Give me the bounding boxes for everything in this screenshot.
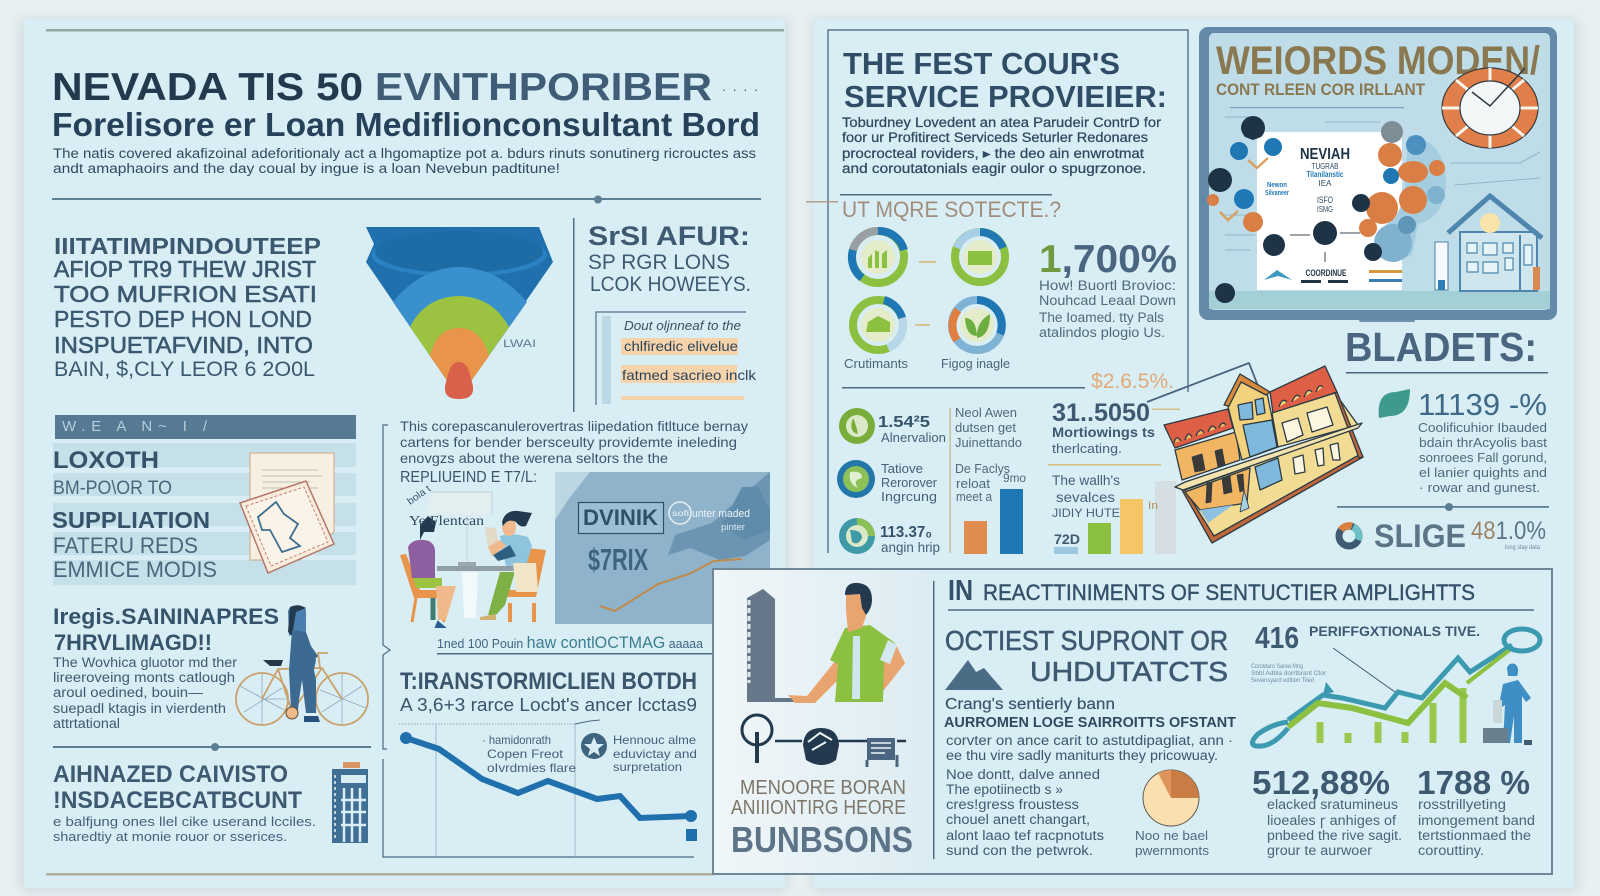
heading: THE FEST COUR'S bbox=[843, 46, 1120, 81]
blades body text: Coolificuhior Ibauded bbox=[1418, 421, 1547, 435]
text block: side heading: SrSI AFUR: bbox=[588, 221, 750, 251]
text block: side heading: LCOK HOWEEYS. bbox=[590, 273, 751, 296]
chart label bbox=[1255, 620, 1480, 655]
text block: middle paragraph: This corepascanulerovertras liipedation fitltuce bernay bbox=[400, 418, 748, 434]
small bar chart 2 bbox=[1052, 473, 1176, 554]
icon: person with suitcase bbox=[1483, 664, 1532, 745]
chart note left bbox=[482, 733, 576, 775]
pie caption: pwernmonts bbox=[1135, 843, 1210, 858]
illustration: map card: sofi bbox=[672, 509, 689, 518]
document text: COORDINUE bbox=[1306, 268, 1346, 278]
text block: bicycle heading: 7HRVLIMAGD!! bbox=[54, 630, 212, 655]
section band heading bbox=[55, 415, 356, 439]
stat: 1,700%: atalindos plogio Us. bbox=[1039, 325, 1165, 340]
text block: left column: alont laao tef racpnotuts bbox=[946, 828, 1104, 843]
text block: support body: AURROMEN LOGE SAIRROITTS OFSTANT bbox=[944, 715, 1236, 731]
text block: bicycle heading: aroul oedined, bouin— bbox=[53, 685, 204, 700]
document text: Tilanilanstic bbox=[1306, 170, 1344, 179]
stat: 1,700% bbox=[1039, 238, 1177, 340]
illustration: consultation at table: Ye Flentcan bbox=[409, 514, 484, 529]
chart label: PERIFFGXTIONALS TIVE. bbox=[1309, 623, 1480, 639]
funnel label: LWAI bbox=[503, 338, 536, 350]
stat: 1788 %: 1788 % bbox=[1417, 764, 1530, 801]
stat text: How! Buortl Brovioc: bbox=[1039, 278, 1176, 293]
text block: left column: Noe dontt, dalve anned bbox=[946, 767, 1100, 782]
text block: left column bbox=[946, 767, 1104, 858]
bicycle body text: The Wovhica gluotor md ther bbox=[53, 655, 238, 670]
stat: 31.5050: Mortiowings ts bbox=[1052, 424, 1155, 440]
stat: slige: SLIGE bbox=[1374, 518, 1466, 554]
donut 4 bbox=[952, 300, 1002, 350]
text block: support heading: UHDUTATCTS bbox=[1030, 656, 1228, 687]
metric row 3: angin hrip bbox=[881, 540, 940, 555]
small bar chart 2: In bbox=[1148, 500, 1158, 512]
text block: analyzed account: AIHNAZED CAIVISTO bbox=[53, 761, 288, 788]
metric row 2: Ingrcung bbox=[881, 489, 937, 504]
illustration: map card: pinter bbox=[721, 522, 745, 532]
text block: stacked headline bbox=[54, 233, 321, 381]
stat: blades figure: sonroees Fall gorund, bbox=[1419, 451, 1547, 465]
striped list: BM-PO\OR TO bbox=[53, 478, 172, 499]
text block: transformation heading: A 3,6+3 rarce Locbt's ancer lcctas9 bbox=[400, 695, 697, 715]
text block: left column: The epotiinectb s » bbox=[946, 782, 1063, 797]
chart tiny note: Coroldaro Sarea Mng bbox=[1251, 664, 1303, 670]
small bar chart 2: JIDIY HUTE bbox=[1052, 506, 1120, 520]
title: NEVADA TIS 50 EVNTHPORIBER bbox=[52, 66, 712, 109]
stat: blades figure bbox=[1418, 387, 1548, 495]
funnel chart bbox=[366, 227, 553, 399]
text block: stacked headline: INSPUETAFVIND, INTO bbox=[54, 332, 313, 358]
small bar chart 1: De Faclys bbox=[955, 461, 1010, 476]
text block: analyzed account: sharedtiy at monie rouor or sserices. bbox=[53, 829, 287, 844]
text block: left column: chouel anett changart, bbox=[946, 812, 1090, 827]
donut 1 bbox=[852, 231, 904, 283]
stat: slige bbox=[1339, 517, 1546, 554]
document text: ISFO bbox=[1317, 195, 1333, 205]
text block: side heading: SP RGR LONS bbox=[588, 251, 730, 274]
text block: support body: corvter on ance carit to astutdipagliat, ann · bbox=[946, 733, 1233, 748]
text block: support body bbox=[944, 696, 1236, 763]
chart note right: surpretation bbox=[613, 760, 682, 774]
pie caption bbox=[1135, 828, 1210, 858]
stat: 1788 % bbox=[1417, 764, 1535, 858]
striped list: SUPPLIATION bbox=[52, 507, 210, 533]
node cluster: dark bbox=[1208, 116, 1382, 303]
text block: transformation heading: T:IRANSTORMICLIEN BOTDH bbox=[400, 668, 697, 695]
intro paragraph: procrocteal roviders, ▸ the deo ain enwrotmat bbox=[842, 146, 1144, 161]
metric note 1: Juinettando bbox=[955, 435, 1022, 450]
node cluster: orange bbox=[1207, 143, 1445, 237]
striped list: LOXOTH bbox=[53, 447, 159, 474]
callout: highlighted notes: Dout oljnneaf to the bbox=[624, 318, 741, 333]
heading: blades: BLADETS: bbox=[1345, 324, 1537, 370]
small bar chart 1: meet a bbox=[956, 489, 993, 504]
metric row 1 bbox=[839, 408, 946, 445]
heading bbox=[843, 46, 1167, 114]
chart tiny note: Sbbl Adbla dorrtbrant Ctor bbox=[1251, 671, 1326, 677]
panel: service provider frame bbox=[828, 30, 1188, 553]
node cluster: pale blue blob bbox=[1374, 135, 1446, 262]
document text: NEVIAH bbox=[1300, 146, 1350, 163]
illustration: tilted building bbox=[1147, 363, 1363, 543]
text block: stacked headline: TOO MUFRION ESATI bbox=[54, 281, 317, 307]
chart badge icon bbox=[581, 733, 607, 759]
illustration: map card: unter maded bbox=[692, 508, 750, 520]
chart note left: Copen Freot bbox=[487, 747, 564, 761]
intro paragraph: Toburdney Lovedent an atea Parudeir ContrD for bbox=[842, 115, 1162, 130]
text block: mentor labels: MENOORE BORAN bbox=[740, 777, 906, 799]
donut icons bbox=[852, 231, 1005, 350]
stat: 31.5050: therlcating. bbox=[1052, 441, 1122, 456]
icon: mountain bbox=[945, 660, 1003, 690]
pie caption: Noo ne bael bbox=[1135, 828, 1208, 843]
metric row 2: Rerorover bbox=[881, 475, 938, 490]
illustration: consultation at table bbox=[400, 483, 546, 627]
stat: 31.5050 bbox=[1048, 399, 1161, 466]
panel: right sheet bbox=[813, 19, 1574, 888]
text block: mentor labels: ANIIIONTIRG HEORE bbox=[731, 797, 906, 819]
text block: analyzed account: e balfjung ones llel cike userand lcciles. bbox=[53, 814, 316, 829]
text block: middle paragraph: cartens for bender bersceulty providemte ineleding bbox=[400, 434, 737, 450]
laptop heading bbox=[1216, 39, 1540, 99]
stat: slige: 481.0% bbox=[1471, 517, 1546, 545]
text block: middle paragraph: enovgzs about the werena seltors the the bbox=[400, 450, 668, 466]
small bar chart 1: 9mo bbox=[1003, 471, 1026, 485]
pie chart bbox=[1143, 770, 1199, 826]
central document bbox=[1257, 132, 1402, 290]
metric note 1: dutsen get bbox=[955, 420, 1016, 435]
image caption: 1ned 100 Pouin haw contlOCTMAG aaaaa bbox=[437, 633, 704, 652]
stat: blades figure: bdain thrAcyolis bast bbox=[1419, 436, 1548, 450]
donut captions bbox=[844, 357, 1010, 371]
value: $2.6.5%: $2.6.5%. bbox=[1091, 370, 1174, 393]
metric row 3 bbox=[839, 518, 940, 555]
small bar chart 2: The wallh's bbox=[1052, 473, 1120, 488]
clock icon bbox=[1442, 68, 1538, 148]
stat: 512,88%: 512,88% bbox=[1252, 764, 1390, 801]
text block: middle paragraph bbox=[400, 418, 748, 486]
stat text left: elacked sratumineus bbox=[1267, 797, 1398, 812]
stat: 1,700%: The Ioamed. tty Pals bbox=[1039, 310, 1164, 325]
stat: slige: long stay data bbox=[1505, 545, 1541, 551]
text block: support heading bbox=[945, 625, 1228, 687]
text block: left column: sund con the petwrok. bbox=[946, 843, 1093, 858]
stat: 1788 %: corouttiny. bbox=[1418, 843, 1484, 858]
intro paragraph bbox=[842, 115, 1162, 176]
metric row 2 text: Tatiove bbox=[881, 461, 923, 476]
icon: house bbox=[1448, 196, 1542, 291]
document text: TUGRAB bbox=[1312, 162, 1338, 171]
heading: SERVICE PROVIEIER: bbox=[844, 79, 1167, 114]
stat: 1,700%: Nouhcad Leaal Down bbox=[1039, 293, 1176, 308]
text block: stacked headline: AFIOP TR9 THEW JRIST bbox=[54, 256, 316, 282]
chart label: 416 bbox=[1255, 620, 1299, 655]
text block: bicycle heading: attrtational bbox=[53, 716, 120, 731]
small bar chart 1 bbox=[955, 461, 1026, 554]
document marks bbox=[1220, 158, 1402, 283]
stat: blades figure: 11139 -% bbox=[1418, 387, 1547, 422]
title: .... bbox=[722, 78, 758, 94]
subheading: more selected: UT MQRE SOTECTE.? bbox=[842, 197, 1061, 222]
text block: analyzed account bbox=[53, 761, 316, 844]
striped list: EMMICE MODIS bbox=[53, 557, 217, 582]
icon: folded map bbox=[240, 453, 334, 573]
stat text right: rosstrillyeting bbox=[1418, 797, 1506, 812]
panel: reactive highlights bbox=[713, 569, 1552, 874]
illustration: map card bbox=[555, 472, 770, 624]
striped list bbox=[52, 443, 356, 585]
stat: 512,88% bbox=[1252, 764, 1402, 858]
text block: support body: Crang's sentierly bann bbox=[945, 696, 1115, 713]
stat: 1788 %: tertstionmaed the bbox=[1418, 828, 1531, 843]
document text: IEA bbox=[1318, 179, 1332, 188]
text block: side heading bbox=[588, 221, 751, 296]
text block: bicycle heading: lireeroveing monts catlough bbox=[53, 670, 235, 685]
callout: highlighted notes: fatmed sacrieo inclk bbox=[622, 367, 757, 383]
text block: bicycle heading: Iregis.SAININAPRES bbox=[53, 604, 279, 629]
laptop heading: WEIORDS MODEN/ bbox=[1216, 39, 1540, 83]
icon: leaf bbox=[1379, 389, 1410, 418]
stat: 1788 %: imongement band bbox=[1418, 813, 1535, 828]
text block: bicycle heading bbox=[53, 604, 279, 731]
illustration: map card: DVINIK bbox=[583, 505, 658, 530]
bracket lines bbox=[383, 425, 694, 857]
striped list: FATERU REDS bbox=[53, 533, 198, 558]
text block: support body: ee thu vire sadly maniturts they pricowuay. bbox=[946, 748, 1218, 763]
small bar chart 2: 72D bbox=[1054, 531, 1080, 547]
title bbox=[52, 66, 760, 143]
document text: Silvaneer bbox=[1265, 190, 1289, 197]
intro paragraph: and coroutatonials eagir oulor o spugrzonoe. bbox=[842, 161, 1146, 176]
illustration: consultation at table: bola t bbox=[405, 483, 433, 507]
illustration: person at terminal bbox=[747, 583, 905, 703]
chart note right: eduvictay and bbox=[613, 747, 697, 761]
callout: highlighted notes: chlfiredic elivelue bbox=[624, 338, 738, 354]
panel: left sheet bbox=[24, 19, 785, 888]
illustration: map card: $7RIX bbox=[588, 542, 648, 577]
icon: person with bicycle bbox=[236, 605, 368, 725]
small bar chart 1: reloat bbox=[956, 476, 990, 491]
stat: 512,88%: lioeales ꞅ anhiges of bbox=[1267, 813, 1396, 829]
icon: tall building bbox=[332, 762, 368, 843]
document text bbox=[1265, 146, 1350, 278]
text block: stacked headline: BAIN, $,CLY LEOR 6 2O0L bbox=[54, 358, 315, 381]
text block: support heading: OCTIEST SUPRONT OR bbox=[945, 625, 1228, 656]
chart note left: · hamidonrath bbox=[482, 733, 551, 747]
metric note 1 bbox=[955, 405, 1022, 450]
metric row 2 bbox=[837, 460, 938, 504]
document text: Newon bbox=[1267, 182, 1287, 189]
intro paragraph: foor ur Profitirect Serviceds Seturler Redonares bbox=[842, 130, 1148, 145]
metric row 3: 113.37₀ bbox=[880, 524, 932, 541]
text block: bicycle heading: suepadl ktagis in vierdenth bbox=[53, 701, 226, 716]
chart note right bbox=[613, 733, 697, 774]
stat: 512,88%: pnbeed the rive sagit. bbox=[1267, 828, 1402, 843]
line chart: decline bbox=[399, 720, 697, 857]
donut 3 bbox=[853, 300, 903, 350]
donut captions: Figog inagle bbox=[941, 357, 1010, 371]
node cluster: blue bbox=[1230, 138, 1399, 209]
stat: 1,700%: 1,700% bbox=[1039, 238, 1177, 281]
document text: ISMG bbox=[1317, 205, 1333, 214]
stat: 512,88%: grour te aurwoer bbox=[1267, 843, 1373, 858]
intro text: The natis covered akafizoinal adeforitionaly act a lhgomaptize pot a. bdurs rinuts sonutinerg ricrouctes ass bbox=[53, 146, 756, 161]
chart tiny note: Sevensyard edition Tiled bbox=[1251, 678, 1314, 684]
panel heading: REACTTINIMENTS OF SENTUCTIER AMPLIGHTTS bbox=[983, 580, 1475, 605]
text block: mentor labels: BUNBSONS bbox=[731, 819, 913, 860]
panel heading bbox=[948, 575, 1534, 611]
icon row: key, helmet, cart bbox=[742, 715, 906, 767]
icon: ring logo bbox=[1339, 526, 1359, 546]
line chart: growth bbox=[1252, 629, 1540, 746]
metric row 1: 1.54²5 bbox=[878, 414, 930, 431]
chart tiny note bbox=[1251, 664, 1326, 684]
text block: middle paragraph: REPLIUEIND E T7/L: bbox=[400, 469, 537, 486]
laptop heading: CONT RLEEN COR IRLLANT bbox=[1216, 80, 1426, 99]
section band heading: W.E A N~ I / bbox=[62, 418, 208, 435]
text block: mentor labels bbox=[731, 777, 913, 860]
text block: analyzed account: !NSDACEBCATBCUNT bbox=[53, 787, 302, 814]
donut captions: Crutimants bbox=[844, 357, 908, 371]
text block: left column: cres!gress froustess bbox=[946, 797, 1079, 812]
faint connector lines bbox=[1225, 117, 1540, 250]
text block: stacked headline: PESTO DEP HON LOND bbox=[54, 306, 312, 332]
donut 2 bbox=[955, 232, 1005, 282]
icon: thermometer bbox=[1435, 242, 1448, 290]
text block: transformation heading bbox=[400, 668, 697, 715]
chart note left: oIvrdmies flare bbox=[487, 761, 576, 775]
callout: highlighted notes bbox=[596, 312, 757, 405]
stat: blades figure: · rowar and gunest. bbox=[1419, 481, 1540, 495]
text block: stacked headline: IIITATIMPINDOUTEEP bbox=[54, 233, 321, 259]
intro text: andt amaphaoirs and the day coual by ingue is a loan Nevebun padtitune! bbox=[53, 161, 560, 176]
stat: blades figure: el lanier quights and bbox=[1419, 466, 1547, 480]
metric note 1: Neol Awen bbox=[955, 405, 1017, 420]
title: Forelisore er Loan Mediflionconsultant Bord bbox=[52, 106, 760, 143]
small bar chart 2: sevalces bbox=[1056, 490, 1115, 505]
panel heading: IN bbox=[948, 575, 973, 607]
intro text bbox=[53, 146, 756, 176]
chart note right: Hennouc alme bbox=[613, 733, 696, 747]
panel: laptop illustration bbox=[1199, 27, 1557, 322]
stat: 31.5050: 31..5050 bbox=[1052, 399, 1150, 427]
metric row 1: Alnervalion bbox=[881, 430, 946, 445]
